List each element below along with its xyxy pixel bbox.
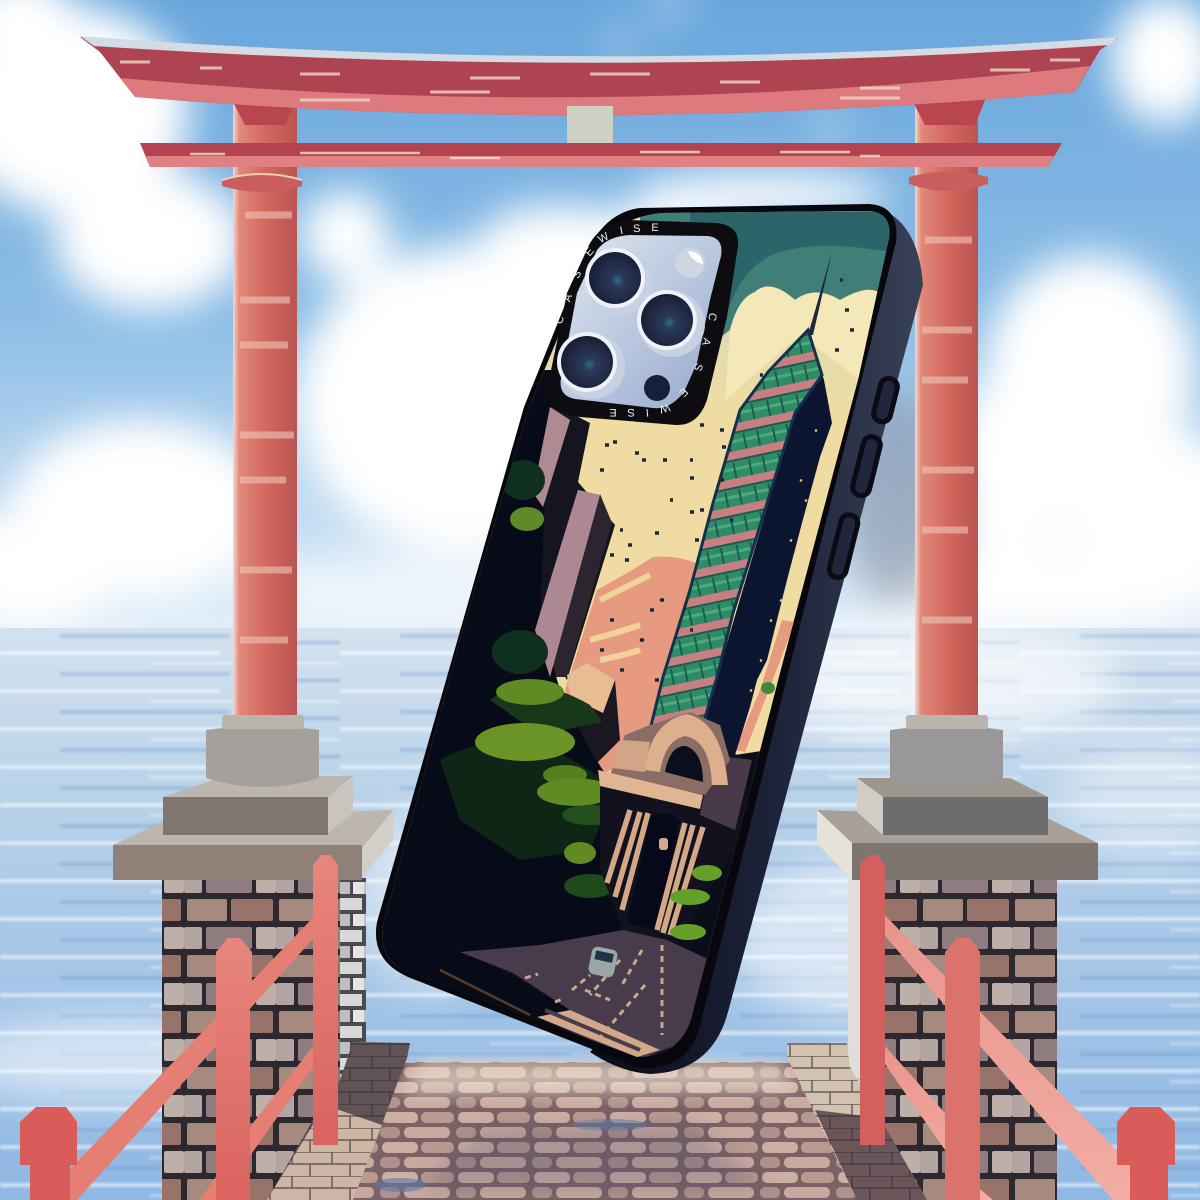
left upper rail xyxy=(40,897,333,1200)
right slab xyxy=(817,810,1098,880)
small cream building xyxy=(567,663,620,762)
left stone base xyxy=(113,715,393,1200)
building 2 xyxy=(535,490,612,677)
clouds xyxy=(0,0,1200,630)
left end post xyxy=(20,1107,77,1200)
right curb xyxy=(787,1043,927,1200)
left pillar xyxy=(216,86,302,720)
trees xyxy=(440,460,775,898)
right end post xyxy=(1117,1107,1175,1200)
right pillar xyxy=(905,86,990,720)
skyscraper xyxy=(648,252,832,755)
brand text: I xyxy=(645,406,649,418)
brand text: E xyxy=(583,245,597,259)
buildings xyxy=(540,406,620,762)
lens 3 xyxy=(557,332,625,399)
left brick pedestal xyxy=(162,878,366,1200)
brand text: C xyxy=(553,314,567,326)
phone case xyxy=(370,200,923,1074)
brand text xyxy=(553,222,719,418)
right step xyxy=(857,778,1048,835)
brand text: C xyxy=(705,311,719,322)
right lower rail xyxy=(868,1027,993,1200)
left middle post xyxy=(216,938,252,1200)
brand text: A xyxy=(561,292,575,304)
lens 2 xyxy=(637,290,705,357)
right brick pedestal xyxy=(848,878,1057,1200)
pink cloud xyxy=(565,557,795,775)
left rear post xyxy=(313,855,338,1145)
microphone xyxy=(644,375,670,401)
brand text: E xyxy=(609,406,617,418)
right rear post xyxy=(860,855,885,1145)
car xyxy=(588,946,618,978)
left lower rail xyxy=(200,1027,330,1200)
camera island xyxy=(548,220,738,425)
right middle post xyxy=(945,938,980,1200)
lower beam xyxy=(140,143,1062,167)
brand text: W xyxy=(658,401,671,415)
right bush xyxy=(670,865,722,940)
brand text: E xyxy=(651,222,659,234)
brand text: S xyxy=(570,269,584,281)
sea xyxy=(0,620,1200,1200)
dark foliage xyxy=(382,370,604,1038)
torii gate xyxy=(80,36,1118,720)
phone side xyxy=(590,205,923,1074)
top beam xyxy=(80,36,1118,115)
side buttons xyxy=(827,377,899,579)
sky background xyxy=(0,0,1200,630)
arched building xyxy=(598,712,752,945)
brand text: S xyxy=(691,362,705,373)
left step xyxy=(163,776,353,835)
road xyxy=(440,930,710,1060)
lower art base xyxy=(400,751,760,1057)
birds xyxy=(600,280,854,680)
brand text: A xyxy=(699,337,713,347)
sky teal band xyxy=(640,211,890,336)
building 2 face xyxy=(535,490,600,677)
stone path xyxy=(267,1042,927,1200)
left slab xyxy=(113,810,393,880)
brand text: I xyxy=(619,225,624,237)
phone body xyxy=(376,204,896,1068)
left pillar collar xyxy=(222,715,304,729)
pale cloud xyxy=(725,287,878,400)
left curb xyxy=(267,1042,410,1200)
flash xyxy=(675,248,705,278)
brand text: S xyxy=(627,406,635,418)
right pillar collar xyxy=(906,715,988,729)
left block xyxy=(206,726,319,787)
building 1 xyxy=(540,406,615,680)
right block xyxy=(890,726,1003,787)
brand text: E xyxy=(676,385,690,399)
brand text: S xyxy=(633,223,641,235)
left railing xyxy=(20,855,338,1200)
building 1 face xyxy=(533,407,570,507)
brand text: W xyxy=(596,230,612,246)
center strut xyxy=(567,106,613,144)
case artwork xyxy=(370,200,900,1070)
right upper rail xyxy=(867,898,1150,1200)
right railing xyxy=(860,855,1175,1200)
right stone base xyxy=(817,715,1098,1200)
lens 1 xyxy=(585,248,653,315)
